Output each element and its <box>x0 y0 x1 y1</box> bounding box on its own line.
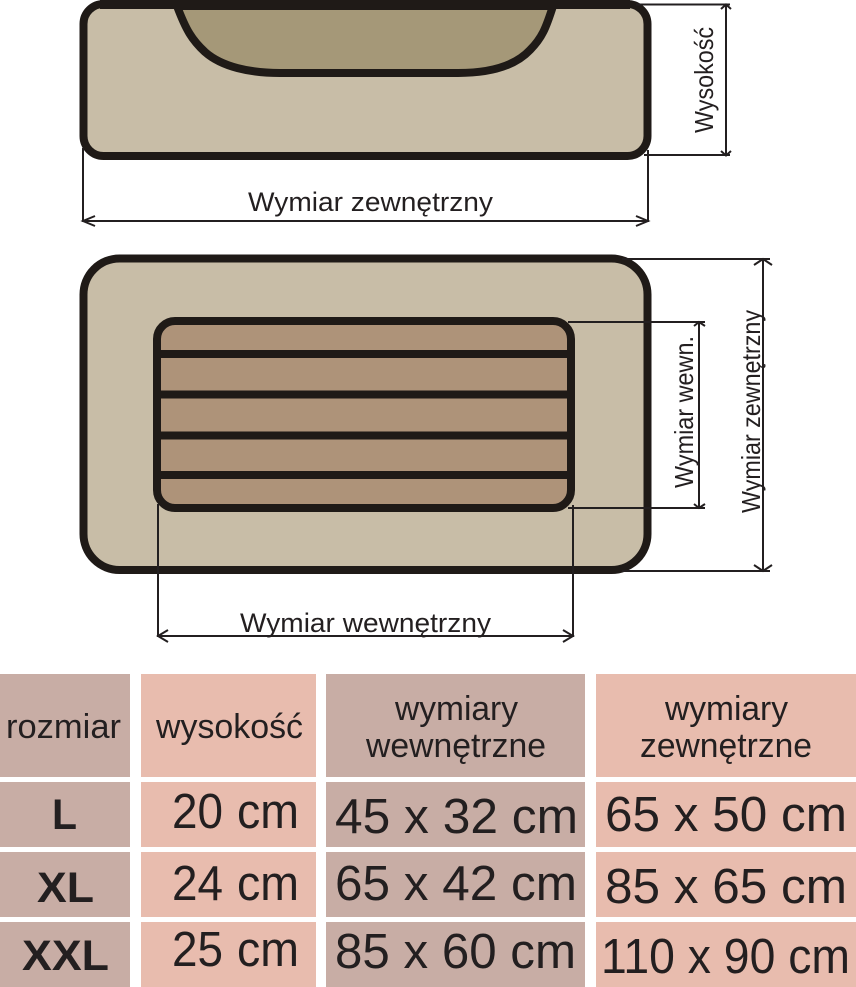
bed body side view <box>84 4 648 156</box>
bed body top view <box>84 258 648 570</box>
column: rozmiar: L <box>52 791 77 839</box>
label: Wymiar wewnętrzny: Wymiar wewnętrzny <box>240 608 492 638</box>
column: wymiary zewnętrzne: 65 x 50 cm <box>605 787 847 842</box>
inner mattress <box>157 321 571 508</box>
column: wysokość: wysokość <box>155 708 303 746</box>
column: wymiary wewnętrzne: wewnętrzne <box>365 727 546 765</box>
bed opening <box>177 6 553 73</box>
mattress stripes <box>157 354 571 475</box>
column: wysokość <box>141 674 316 987</box>
dimension: inner depth <box>568 322 705 508</box>
column: wymiary zewnętrzne <box>596 674 856 987</box>
column: wymiary wewnętrzne: wymiary <box>394 690 518 728</box>
column: wymiary wewnętrzne <box>326 674 585 987</box>
column: wysokość: cm <box>237 857 299 911</box>
column: wysokość: cm <box>237 785 299 839</box>
column: wymiary wewnętrzne: 45 x 32 cm <box>335 789 578 844</box>
column: wymiary zewnętrzne: zewnętrzne <box>640 727 812 765</box>
column: wysokość: 24 <box>172 857 223 911</box>
label: Wymiar zewnętrzny: Wymiar zewnętrzny <box>736 310 766 513</box>
label: Wymiar wewn.: Wymiar wewn. <box>669 336 699 488</box>
column: wysokość: 25 <box>172 923 223 977</box>
column: wymiary wewnętrzne: 65 x 42 cm <box>335 856 577 911</box>
dimension: outer width side view <box>83 148 648 226</box>
column: wysokość: 20 <box>172 785 223 839</box>
column: wymiary zewnętrzne: wymiary <box>664 690 788 728</box>
panel: bed side view <box>84 0 648 156</box>
panel: bed top view <box>84 258 648 570</box>
dimension: inner width <box>158 504 573 642</box>
column: rozmiar: XL <box>37 864 94 912</box>
dimension: outer depth <box>622 259 772 571</box>
column: rozmiar <box>0 674 130 987</box>
top edge of bed <box>100 0 630 9</box>
label: Wysokość: Wysokość <box>689 27 719 133</box>
dimension: height of bed <box>636 4 731 156</box>
column: rozmiar: XXL <box>22 932 109 980</box>
column: wymiary wewnętrzne: 85 x 60 cm <box>335 924 576 979</box>
column: rozmiar: rozmiar <box>6 708 121 746</box>
column: wysokość: cm <box>237 923 299 977</box>
column: wymiary zewnętrzne: 85 x 65 cm <box>605 859 847 914</box>
label: Wymiar zewnętrzny: Wymiar zewnętrzny <box>248 187 494 217</box>
table: sizes <box>0 674 856 987</box>
